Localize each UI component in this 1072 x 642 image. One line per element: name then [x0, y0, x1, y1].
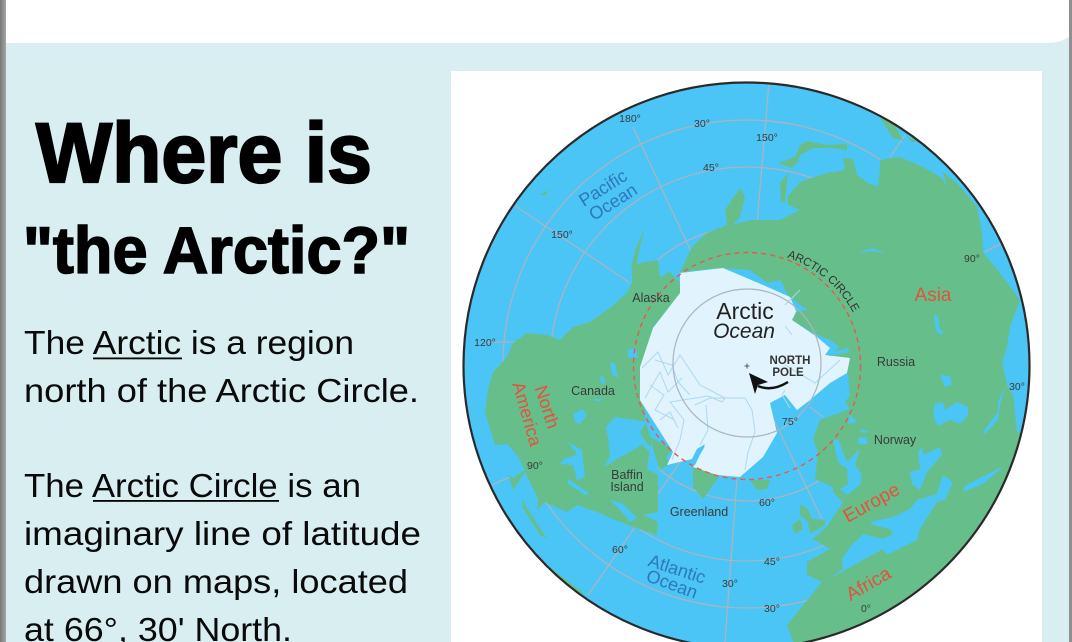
continent labels [508, 285, 952, 606]
polar map [462, 81, 1031, 642]
land: Eurasia and Africa [680, 157, 1040, 642]
ocean labels: Atlantic [646, 550, 708, 588]
place labels: Canada [571, 384, 615, 398]
degree labels: 30° [764, 603, 780, 615]
degree labels: 45° [703, 162, 719, 174]
degree labels: 75° [782, 416, 798, 428]
place labels: Island [610, 480, 644, 494]
ocean labels: Ocean [585, 179, 641, 225]
north pole label and marker: NORTH [770, 355, 810, 367]
degree labels: 60° [759, 497, 775, 509]
right window edge [1069, 0, 1072, 642]
arctic ocean label [713, 298, 775, 343]
land: North America [485, 260, 680, 535]
75 degree circle [673, 289, 821, 437]
degree labels: 60° [612, 544, 628, 556]
place labels: Russia [877, 355, 915, 369]
degree labels: 90° [527, 460, 543, 472]
ocean disc [464, 82, 1030, 642]
ice contours [642, 290, 840, 470]
degree labels: 150° [756, 132, 778, 144]
degree labels: 90° [964, 253, 980, 265]
arrow to north pole [749, 373, 788, 394]
degree labels [474, 113, 1025, 615]
degree labels: 45° [764, 556, 780, 568]
globe outline [464, 82, 1030, 642]
continent labels: Europe [840, 479, 904, 527]
arctic ocean label: Ocean [713, 320, 775, 343]
text block: definition of the Arctic Circle: imaginary line of latitude [24, 516, 421, 553]
degree labels: 30° [694, 118, 710, 130]
seas and lakes [495, 249, 1006, 580]
text block: definition of the Arctic Circle [24, 468, 421, 642]
title [23, 106, 410, 287]
text block: definition of the Arctic: north of the Arctic Circle. [24, 373, 419, 410]
north pole label and marker [744, 355, 810, 379]
place labels: Norway [874, 433, 917, 447]
text block: definition of the Arctic [24, 325, 419, 410]
degree labels: 30° [722, 578, 738, 590]
degree labels: 0° [861, 603, 871, 615]
arctic circle dashed line [634, 252, 860, 480]
place labels: Greenland [670, 505, 728, 519]
place labels [571, 291, 917, 519]
place labels: Baffin [611, 468, 643, 482]
continent labels: North [531, 383, 563, 431]
ice cap [640, 268, 850, 477]
ocean labels: Pacific [575, 165, 631, 211]
left window edge [0, 0, 6, 642]
degree labels: 150° [551, 229, 573, 241]
ocean labels [575, 165, 708, 602]
arctic circle label: ARCTIC CIRCLE [787, 251, 860, 312]
continent labels: Africa [842, 563, 895, 606]
continent labels: America [508, 380, 546, 449]
place labels: Alaska [632, 291, 670, 305]
arctic ocean label: Arctic [716, 298, 774, 324]
land: islands and peninsulas [522, 118, 920, 594]
text block: definition of the Arctic: The Arctic is a region [24, 325, 354, 362]
degree labels: 120° [474, 337, 496, 349]
text block: definition of the Arctic Circle: drawn on maps, located [24, 564, 408, 601]
continent labels: Asia [915, 285, 952, 306]
title: Where is [36, 106, 372, 200]
top white band [0, 0, 1069, 43]
graticule [484, 82, 1002, 642]
panel: map card [451, 71, 1042, 642]
title: "the Arctic?" [23, 213, 410, 287]
degree labels: 30° [1009, 381, 1025, 393]
arctic inlets [682, 280, 849, 465]
north pole label and marker: POLE [772, 367, 804, 379]
text block: definition of the Arctic Circle: The Arctic Circle is an [24, 468, 361, 505]
degree labels: 180° [619, 113, 641, 125]
ocean labels: Ocean [644, 566, 700, 602]
